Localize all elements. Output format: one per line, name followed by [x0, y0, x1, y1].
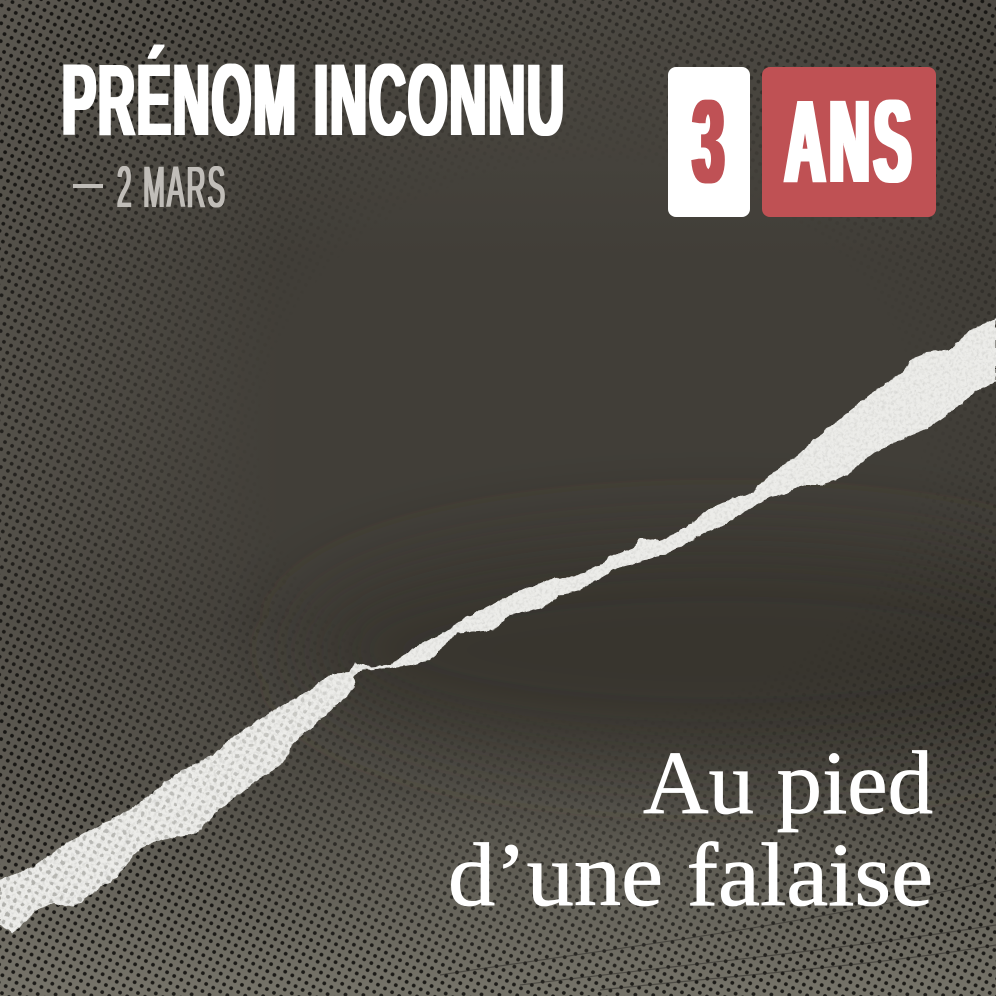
badge: unit — [762, 67, 936, 217]
badge: unit: ANS — [785, 76, 911, 208]
title: Au pied — [643, 734, 933, 833]
date line: 2 MARS — [117, 154, 225, 220]
title: d’une falaise — [448, 826, 933, 925]
badge: number — [668, 67, 750, 217]
heading: name: PRÉNOM INCONNU — [62, 43, 564, 158]
torn paper strip — [0, 318, 996, 934]
age badge — [668, 67, 936, 217]
badge: number: 3 — [693, 76, 724, 208]
title — [448, 734, 933, 925]
